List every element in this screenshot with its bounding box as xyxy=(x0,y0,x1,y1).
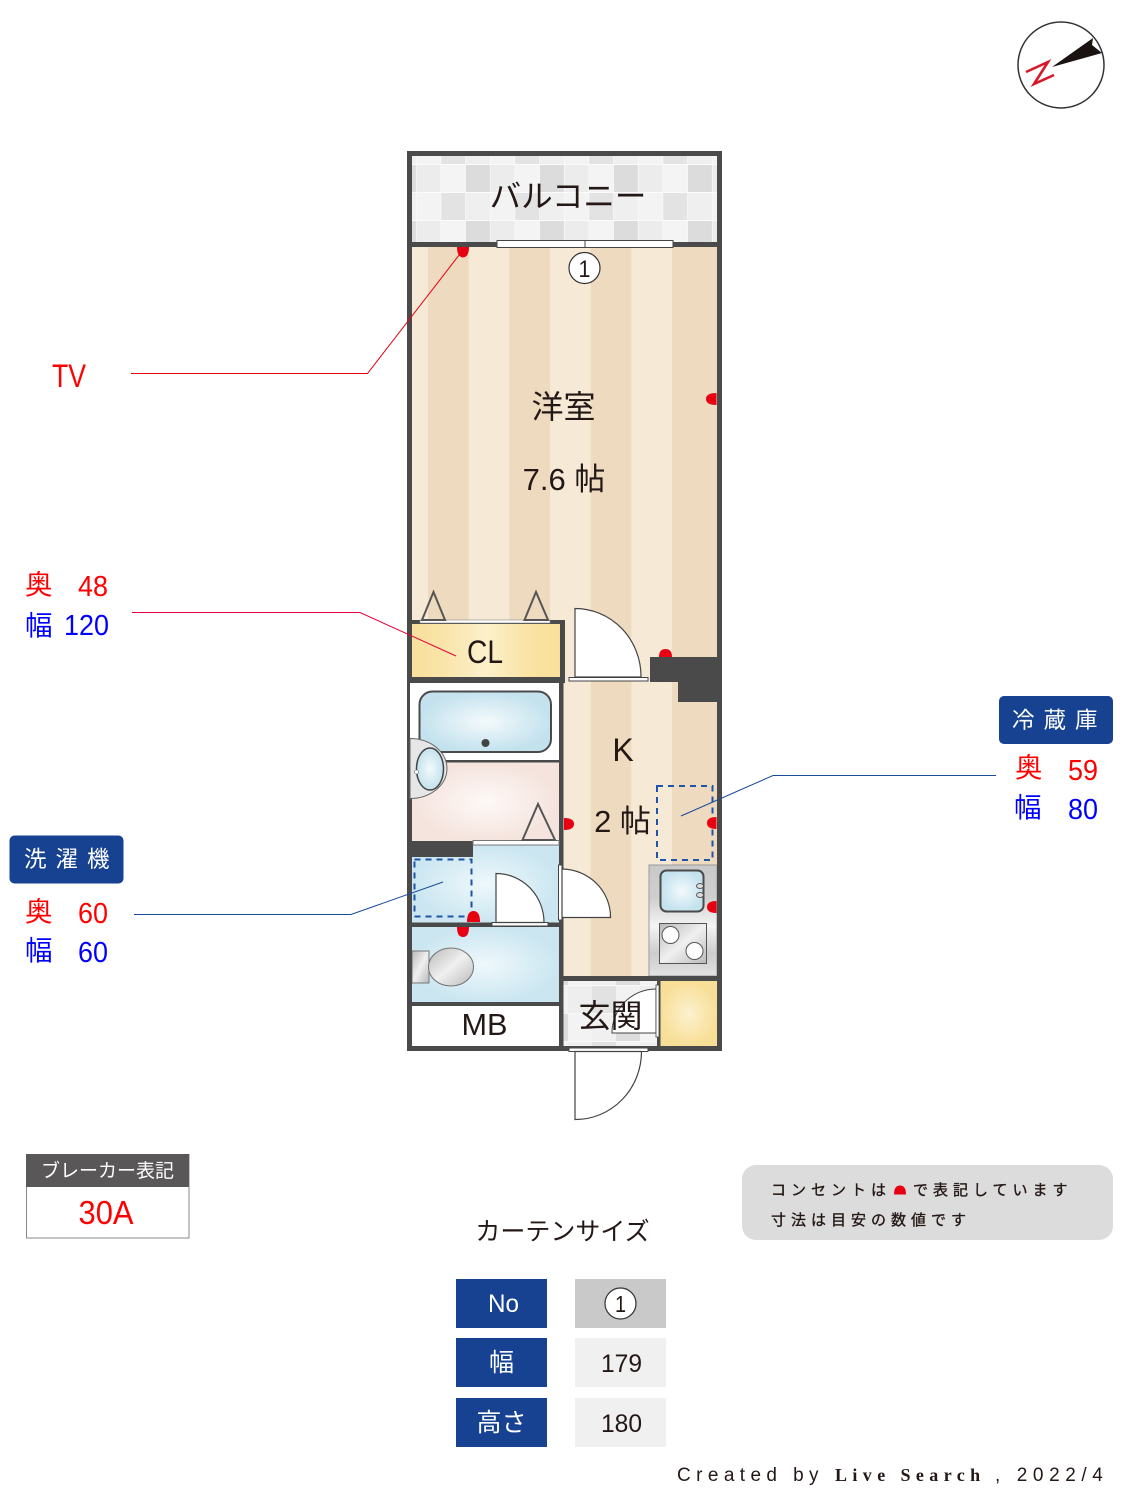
curtain size table: 幅 xyxy=(489,1349,514,1377)
entrance inner door xyxy=(612,985,659,1037)
kitchen counter xyxy=(649,865,717,976)
room label: 2 jo: 2 帖 xyxy=(594,804,651,839)
leader line: fridge xyxy=(681,776,996,816)
label: TV: TV xyxy=(52,358,87,394)
dashed fridge space xyxy=(657,786,712,860)
fridge callout: 幅 xyxy=(1014,792,1042,823)
washing machine callout: 60 xyxy=(78,898,108,930)
leader line: washing machine xyxy=(134,882,443,914)
meter box xyxy=(412,1006,559,1046)
washroom floor xyxy=(412,762,559,842)
walls xyxy=(407,151,722,1051)
shoe box xyxy=(660,981,717,1046)
bathroom xyxy=(410,683,560,761)
room label: 7.6 jo: 7.6 帖 xyxy=(523,462,605,497)
fridge callout: 冷蔵庫 xyxy=(1012,708,1107,733)
closet dimensions: 幅 xyxy=(25,610,52,641)
closet dimensions xyxy=(25,569,109,642)
closet dimensions: 奥 xyxy=(25,569,52,600)
toilet room xyxy=(412,927,559,1003)
room label: western room: 洋室 xyxy=(531,389,596,425)
curtain size table: 180 xyxy=(601,1410,642,1438)
washing machine callout: 60 xyxy=(78,937,108,969)
entrance outer door xyxy=(569,1048,648,1120)
floor plan xyxy=(407,151,722,1120)
balcony xyxy=(412,156,717,243)
compass: north indicator xyxy=(1018,22,1104,108)
fridge callout: 80 xyxy=(1068,794,1098,826)
washing machine callout: 奥 xyxy=(25,896,52,927)
curtain size table: 1 xyxy=(615,1291,626,1317)
fridge callout: 奥 xyxy=(1015,752,1042,783)
laundry room floor xyxy=(412,845,559,923)
fridge callout: 59 xyxy=(1068,755,1098,787)
meter box: MB xyxy=(462,1007,508,1042)
dashed washing machine space xyxy=(414,860,472,916)
window number 1: 1 xyxy=(578,256,590,283)
laundry door xyxy=(492,874,548,926)
curtain size table: 179 xyxy=(601,1350,642,1378)
balcony: バルコニー xyxy=(490,178,646,214)
note box: で表記しています xyxy=(913,1182,1073,1199)
room door xyxy=(569,608,648,681)
leader line: TV xyxy=(131,250,463,374)
balcony window xyxy=(497,240,673,248)
curtain size table: No xyxy=(488,1290,519,1318)
entrance floor xyxy=(563,981,657,1046)
washing machine callout: 幅 xyxy=(25,935,52,966)
leader line: closet xyxy=(132,612,456,656)
credit line: Live Search xyxy=(835,1465,986,1485)
note box: コンセントは xyxy=(771,1182,891,1199)
curtain size table xyxy=(456,1279,666,1447)
room label: kitchen: K xyxy=(612,732,634,768)
sink basin xyxy=(410,738,447,798)
washroom door triangle and rail xyxy=(473,804,559,845)
breaker box xyxy=(26,1154,189,1238)
closet dimensions: 48 xyxy=(78,571,108,603)
curtain size title: カーテンサイズ xyxy=(475,1218,650,1246)
fridge callout xyxy=(999,696,1113,826)
room label: entrance: 玄関 xyxy=(578,998,643,1034)
breaker box: 30A xyxy=(78,1194,134,1231)
room floor: striped wood xyxy=(410,245,718,980)
washing machine callout xyxy=(10,836,124,969)
note box xyxy=(742,1165,1113,1240)
credit line: , 2022/4 xyxy=(995,1465,1108,1486)
closet: CL xyxy=(467,634,503,670)
credit line xyxy=(677,1465,1108,1486)
closet door triangles and rail xyxy=(420,592,550,623)
breaker box: ブレーカー表記 xyxy=(41,1159,174,1182)
closet dimensions: 120 xyxy=(64,610,109,642)
closet xyxy=(412,624,560,677)
credit line: Created by xyxy=(677,1465,824,1486)
window number 1 xyxy=(569,252,600,284)
note box: 寸法は目安の数値です xyxy=(771,1212,971,1229)
outlets: red markers xyxy=(457,247,716,937)
curtain size table: 高さ xyxy=(476,1409,527,1437)
kitchen side door xyxy=(558,865,611,920)
washing machine callout: 洗濯機 xyxy=(24,847,119,872)
